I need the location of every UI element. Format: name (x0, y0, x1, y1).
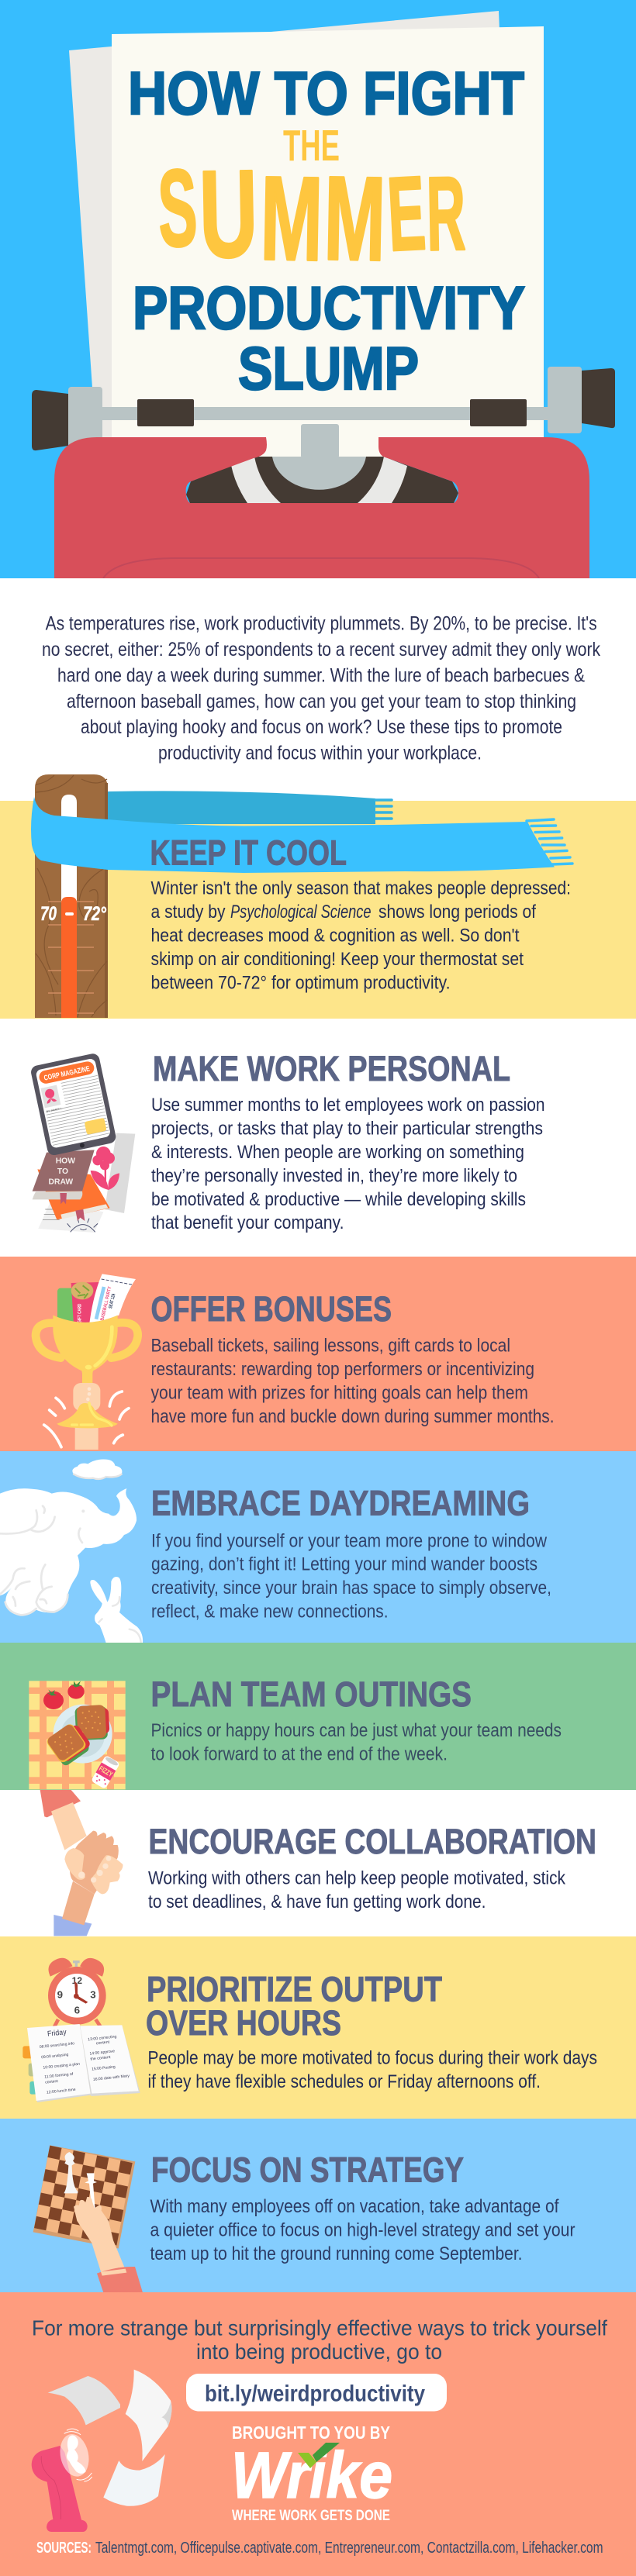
panel: prioritize output (0, 1936, 636, 2119)
text block: Use summer months to let employees work on passion (151, 1095, 544, 1116)
text block (150, 2196, 576, 2264)
text block: Baseball tickets, sailing lessons, gift cards to local (150, 1335, 510, 1357)
icon: alarm clock and planner: content (96, 2040, 110, 2046)
text block: heat decreases mood & cognition as well. So don't (150, 926, 520, 946)
text block: Psychological Science (230, 902, 371, 922)
text block: they’re personally invested in, they’re more likely to (151, 1166, 517, 1186)
icon: alarm clock and planner: 11:00 forming of (44, 2072, 74, 2080)
icon: alarm clock and planner: 13:00 correcting (88, 2034, 117, 2042)
icon: trophy: BASEBALL PARTY (99, 1285, 113, 1321)
icon: tablet and books: HOW (56, 1157, 75, 1166)
panel: encourage collaboration (0, 1790, 636, 1936)
icon: alarm clock and planner: 08:00 searching info (40, 2041, 75, 2050)
icon: alarm clock and planner: 15:00 Posting (92, 2064, 116, 2072)
text block: to look forward to at the end of the week. (150, 1744, 448, 1764)
text block: a study by (150, 902, 225, 922)
text block: With many employees off on vacation, take advantage of (150, 2196, 559, 2217)
text block: skimp on air conditioning! Keep your thermostat set (150, 949, 524, 970)
text: sources: SOURCES: (36, 2540, 92, 2557)
text block: gazing, don’t fight it! Letting your mind wander boosts (151, 1554, 537, 1575)
panel: hero (0, 0, 636, 578)
icon: thermometer: 70 (40, 903, 57, 925)
text block (151, 1530, 551, 1622)
heading: MAKE WORK PERSONAL (153, 1049, 510, 1088)
icon: alarm clock and planner: content (45, 2079, 59, 2085)
icon: tablet and books: BY JAMES L. (46, 1107, 63, 1113)
icon: cloud animals (0, 1460, 143, 1643)
icon: alarm clock and planner: Friday (47, 2028, 67, 2039)
text block (150, 1335, 554, 1427)
icon: alarm clock and planner: 10:00 creating a plan (43, 2062, 81, 2071)
text block: shows long periods of (378, 902, 536, 922)
icon: alarm clock and planner: 12 (72, 1975, 82, 1986)
text block (150, 878, 571, 994)
text block: If you find yourself or your team more prone to window (151, 1530, 548, 1552)
title: U (199, 143, 259, 284)
panel: offer bonuses (0, 1257, 636, 1451)
panel: embrace daydreaming (0, 1451, 636, 1643)
title: PRODUCTIVITY (133, 274, 525, 342)
text block: Working with others can help keep people motivated, stick (148, 1868, 566, 1888)
title: R (426, 155, 466, 272)
link pill (186, 2374, 447, 2411)
icon: trophy: SEAT 12A (108, 1292, 117, 1309)
icon: tablet and books: CORP MAGAZINE (43, 1064, 91, 1083)
heading: FOCUS ON STRATEGY (151, 2150, 464, 2189)
icon: alarm clock and planner: 09:00 analysing (41, 2053, 69, 2060)
icon: thermometer (35, 774, 108, 1018)
text block: to set deadlines, & have fun getting work done. (148, 1891, 486, 1912)
icon: alarm clock and planner (22, 1954, 140, 2102)
icon: thermometer: 72° (83, 903, 107, 925)
text block (151, 1095, 544, 1233)
text block: be motivated & productive — while developing skills (151, 1189, 526, 1210)
title: SLUMP (238, 334, 419, 402)
icon: tablet and books: DRAW (49, 1178, 73, 1186)
text: brought to you by: BROUGHT TO YOU BY (232, 2423, 390, 2443)
title: HOW TO FIGHT (128, 59, 524, 127)
heading: EMBRACE DAYDREAMING (151, 1484, 530, 1522)
icon: chess board (33, 2145, 143, 2292)
text block: projects, or tasks that play to their particular strengths (151, 1118, 543, 1140)
panel: plan team outings (0, 1643, 636, 1790)
icon: alarm clock and planner: the content (90, 2055, 111, 2062)
icon: alarm clock and planner: 16:00 date with Mary (93, 2074, 130, 2082)
text block (148, 1868, 566, 1912)
icon: picnic: FIZZY (98, 1764, 115, 1778)
panel: intro (0, 578, 636, 801)
icon: alarm clock and planner: 14:00 approve (89, 2049, 116, 2057)
title (128, 59, 525, 402)
icon: alarm clock and planner: 6 (74, 2004, 80, 2016)
title: M (259, 151, 323, 286)
icon: tablet and books: TO (57, 1167, 68, 1176)
typewriter (32, 367, 615, 578)
icon: alarm clock and planner: 12:00 lunch time (47, 2088, 76, 2095)
title: E (385, 154, 428, 273)
link pill: bit.ly/weirdproductivity (205, 2381, 425, 2406)
text block: Winter isn't the only season that makes people depressed: (150, 878, 571, 899)
icon: trophy (36, 1274, 138, 1450)
panel: make work personal (0, 1019, 636, 1257)
back sheet of paper (69, 11, 544, 442)
heading: OVER HOURS (146, 2003, 341, 2043)
icon: tablet and books (29, 1053, 135, 1233)
text block: creativity, since your brain has space to simply observe, (151, 1578, 551, 1598)
text block: & interests. When people are working on something (151, 1142, 524, 1163)
icon: alarm clock and planner: 9 (57, 1988, 63, 2000)
heading: PRIORITIZE OUTPUT (147, 1969, 442, 2009)
panel: intro: about playing hooky and focus on work? Use these tips to promote (81, 716, 562, 738)
heading (146, 1969, 442, 2043)
text block: restaurants: rewarding top performers or incentivizing (150, 1359, 534, 1380)
text block: a quieter office to focus on high-level strategy and set your (150, 2220, 576, 2240)
heading: OFFER BONUSES (150, 1289, 392, 1329)
text block: your team with prizes for hitting goals can help them (150, 1383, 528, 1403)
panel: keep it cool (0, 774, 636, 1019)
icon: handshake (40, 1790, 123, 1936)
title: S (156, 146, 199, 270)
text block: between 70-72° for optimum productivity. (150, 972, 450, 994)
heading: KEEP IT COOL (150, 833, 347, 873)
text: where work gets done: WHERE WORK GETS DONE (232, 2508, 390, 2524)
text block: call to action: For more strange but surprisingly effective ways to trick yourself (32, 2316, 607, 2340)
title: THE (283, 121, 340, 171)
panel: focus on strategy (0, 2119, 636, 2292)
panel: call to action (0, 2292, 636, 2576)
text block: team up to hit the ground running come September. (150, 2243, 523, 2264)
icon: picnic (29, 1681, 126, 1789)
icon: scarf (31, 791, 572, 873)
text block: call to action (32, 2316, 607, 2364)
icon: alarm clock and planner: 3 (90, 1988, 96, 2000)
text block: Picnics or happy hours can be just what your team needs (150, 1720, 562, 1741)
text block: call to action: into being productive, go to (196, 2340, 442, 2364)
title: M (323, 151, 386, 286)
panel: intro: productivity and focus within your workplace. (158, 743, 482, 764)
text block: that benefit your company. (151, 1212, 344, 1233)
text block: reflect, & make new connections. (151, 1602, 388, 1622)
icon: trophy: GIFT CARD (78, 1303, 82, 1323)
text block (150, 1720, 562, 1764)
front sheet of paper (112, 26, 544, 459)
logo: Wrike: Wrike (231, 2439, 392, 2512)
icon: fan and papers (32, 2370, 171, 2532)
text block: if they have flexible schedules or Friday afternoons off. (147, 2071, 541, 2092)
text block: have more fun and buckle down during summer months. (150, 1406, 554, 1427)
text block (147, 2048, 597, 2092)
heading: PLAN TEAM OUTINGS (150, 1674, 472, 1714)
